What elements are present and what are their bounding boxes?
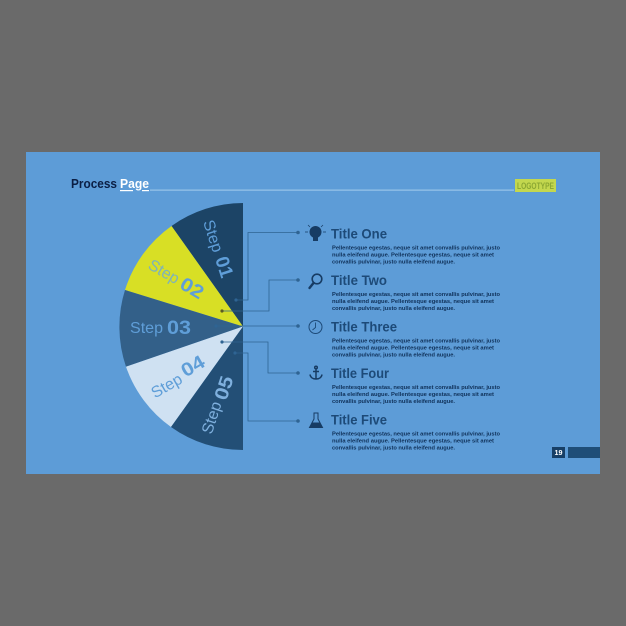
title four text: Title Four <box>331 366 390 381</box>
connector: step 05 to title five <box>233 351 300 423</box>
title one text: convallis pulvinar, justo nulla eleifend augue. <box>332 260 455 266</box>
title two text: Pellentesque egestas, neque sit amet convallis pulvinar, justo <box>332 292 501 298</box>
title two text: Title Two <box>331 273 387 288</box>
title two text <box>331 273 501 312</box>
slice: step 01: 01 <box>210 254 237 281</box>
logotype badge: LOGOTYPE <box>517 181 554 191</box>
slice: step 05: 05 <box>211 373 239 403</box>
pie chart <box>119 203 243 450</box>
title four text: nulla eleifend augue. Pellentesque egestas, neque sit amet <box>332 392 494 398</box>
page number: 19 <box>554 450 563 457</box>
title five text: convallis pulvinar, justo nulla eleifend augue. <box>332 446 455 452</box>
connector: step 04 to title four <box>220 340 300 375</box>
page number <box>552 447 565 458</box>
header rule <box>150 190 514 191</box>
slice: step 02: Step <box>145 257 182 288</box>
connector: step 03 to title three <box>214 324 300 328</box>
title three text: Pellentesque egestas, neque sit amet convallis pulvinar, justo <box>332 338 501 344</box>
background panel <box>26 152 600 474</box>
title one text <box>331 226 501 266</box>
title two text: convallis pulvinar, justo nulla eleifend augue. <box>332 306 455 312</box>
slice: step 03: 03 <box>167 318 191 339</box>
footer bar <box>568 447 600 458</box>
slice: step 04: 04 <box>178 352 209 382</box>
title three text <box>331 320 501 358</box>
slice: step 02: 02 <box>176 274 207 304</box>
slice: step 05: Step <box>199 400 226 436</box>
heading: Page <box>120 176 149 191</box>
slice: step 03: Step <box>130 320 163 337</box>
heading <box>71 176 149 191</box>
slice: step 03 <box>119 290 243 367</box>
connector: step 02 to title two <box>220 278 300 313</box>
title four text: convallis pulvinar, justo nulla eleifend augue. <box>332 399 455 405</box>
title four text <box>331 366 501 405</box>
title five text: nulla eleifend augue. Pellentesque egestas, neque sit amet <box>332 438 494 444</box>
title one text: Pellentesque egestas, neque sit amet convallis pulvinar, justo <box>332 246 501 252</box>
title two text: nulla eleifend augue. Pellentesque egestas, neque sit amet <box>332 299 494 305</box>
slice: step 05 <box>171 326 243 450</box>
title five text <box>331 412 501 452</box>
heading: Process <box>71 176 117 191</box>
connector: step 01 to title one <box>234 231 300 302</box>
title three text: Title Three <box>331 320 397 334</box>
icon: clock <box>309 320 322 334</box>
title three text: nulla eleifend augue. Pellentesque egestas, neque sit amet <box>332 346 494 352</box>
slice: step 04 <box>126 326 243 427</box>
slice: step 01 <box>172 203 243 326</box>
title five text: Title Five <box>331 412 387 428</box>
logotype badge <box>515 179 556 192</box>
title three text: convallis pulvinar, justo nulla eleifend augue. <box>332 352 455 358</box>
icon: flask <box>310 413 322 428</box>
icon: anchor <box>310 366 322 379</box>
slice: step 04: Step <box>148 371 186 402</box>
icon: light bulb <box>305 225 326 241</box>
slice: step 01: Step <box>199 218 226 255</box>
title five text: Pellentesque egestas, neque sit amet convallis pulvinar, justo <box>332 432 501 438</box>
title one text: Title One <box>331 226 387 242</box>
icon: magnifier <box>310 274 322 288</box>
title four text: Pellentesque egestas, neque sit amet convallis pulvinar, justo <box>332 385 501 391</box>
title one text: nulla eleifend augue. Pellentesque egestas, neque sit amet <box>332 252 494 258</box>
slice: step 02 <box>125 226 243 326</box>
